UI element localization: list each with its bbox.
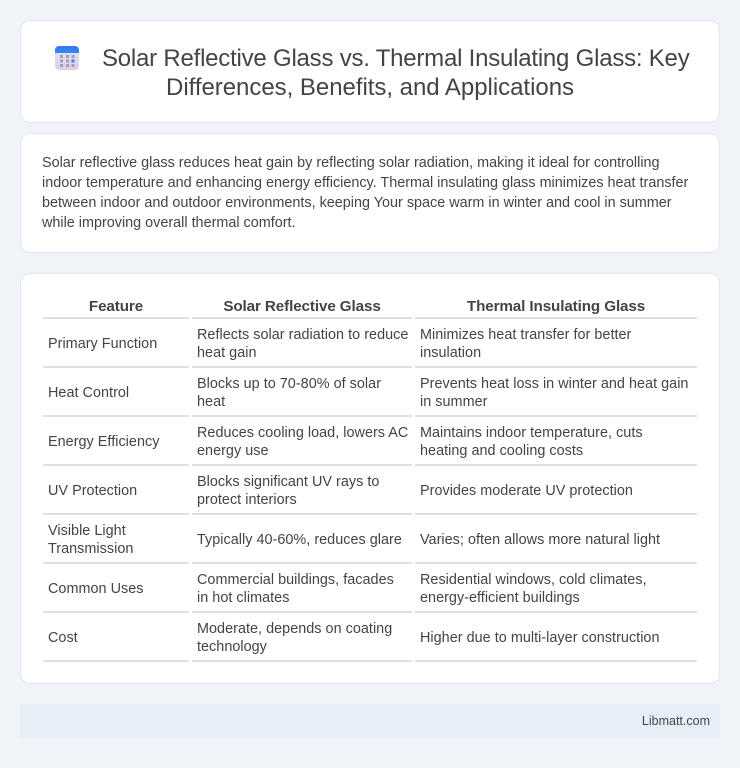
cell: solar energy efficiency	[197, 425, 408, 459]
title: Solar Reflective Glass vs. Thermal Insulating Glass: Key	[102, 45, 689, 72]
cell: thermal primary function: Minimizes heat transfer for better	[420, 327, 631, 343]
cell: thermal cost: Higher due to multi-layer construction	[420, 630, 660, 646]
cell: solar primary function: heat gain	[197, 345, 256, 361]
cell: solar UV protection: protect interiors	[197, 492, 297, 508]
row: Visible Light Transmission: Transmission	[48, 541, 133, 557]
intro text: Solar reflective glass reduces heat gain by reflecting solar radiation, making it ideal for controlling	[42, 155, 660, 171]
cell: thermal UV protection: Provides moderate UV protection	[420, 483, 633, 499]
cell: thermal primary function: insulation	[420, 345, 481, 361]
cell: solar common uses: Commercial buildings, facades	[197, 572, 394, 588]
cell: solar heat control	[197, 376, 381, 410]
cell: thermal heat control: in summer	[420, 394, 487, 410]
cell: thermal common uses: energy-efficient buildings	[420, 590, 580, 606]
cell: thermal energy efficiency: heating and cooling costs	[420, 443, 583, 459]
title	[102, 45, 690, 101]
cell: thermal energy efficiency: Maintains indoor temperature, cuts	[420, 425, 643, 441]
table	[43, 298, 697, 662]
cell: thermal heat control	[420, 376, 688, 410]
footer text: Libmatt.com	[642, 714, 710, 728]
header card	[20, 20, 720, 123]
cell: solar energy efficiency: Reduces cooling load, lowers AC	[197, 425, 408, 441]
cell: solar common uses	[197, 572, 394, 606]
row: Visible Light Transmission: Visible Light	[48, 523, 126, 539]
table card	[20, 273, 720, 684]
cell: solar cost	[197, 621, 392, 655]
cell: thermal heat control: Prevents heat loss in winter and heat gain	[420, 376, 688, 392]
row: Heat Control: Heat Control	[48, 385, 129, 401]
cell: solar cost: technology	[197, 639, 267, 655]
cell: solar cost: Moderate, depends on coating	[197, 621, 392, 637]
row: Cost: Cost	[48, 630, 78, 646]
cell: solar common uses: in hot climates	[197, 590, 289, 606]
cell: thermal visible light: Varies; often allows more natural light	[420, 532, 660, 548]
title: Differences, Benefits, and Applications	[166, 74, 574, 101]
cell: thermal primary function	[420, 327, 632, 361]
row: Visible Light Transmission	[48, 523, 133, 557]
intro text: while improving overall thermal comfort.	[42, 215, 296, 231]
row: Common Uses: Common Uses	[48, 581, 144, 597]
cell: solar UV protection	[197, 474, 379, 508]
row: Primary Function: Primary Function	[48, 336, 157, 352]
cell: solar primary function	[197, 327, 408, 361]
header: Thermal Insulating Glass: Thermal Insulating Glass	[467, 298, 645, 315]
intro text	[42, 155, 688, 231]
row: Energy Efficiency: Energy Efficiency	[48, 434, 159, 450]
intro text: indoor temperature and enhancing energy efficiency. Thermal insulating glass minimizes heat transfer	[42, 175, 688, 191]
cell: solar primary function: Reflects solar radiation to reduce	[197, 327, 408, 343]
intro text: between indoor and outdoor environments, keeping Your space warm in winter and cool in summer	[42, 195, 672, 211]
cell: thermal common uses: Residential windows, cold climates,	[420, 572, 647, 588]
cell: thermal common uses	[420, 572, 647, 606]
cell: solar heat control: Blocks up to 70-80% of solar	[197, 376, 381, 392]
cell: solar visible light: Typically 40-60%, reduces glare	[197, 532, 402, 548]
header: Feature: Feature	[89, 298, 143, 315]
header: Solar Reflective Glass: Solar Reflective Glass	[223, 298, 381, 315]
cell: solar UV protection: Blocks significant UV rays to	[197, 474, 379, 490]
row: UV Protection: UV Protection	[48, 483, 137, 499]
icon: calendar	[55, 46, 79, 70]
footer bar	[20, 704, 720, 738]
cell: solar heat control: heat	[197, 394, 225, 410]
intro card	[20, 133, 720, 253]
cell: solar energy efficiency: energy use	[197, 443, 269, 459]
cell: thermal energy efficiency	[420, 425, 643, 459]
